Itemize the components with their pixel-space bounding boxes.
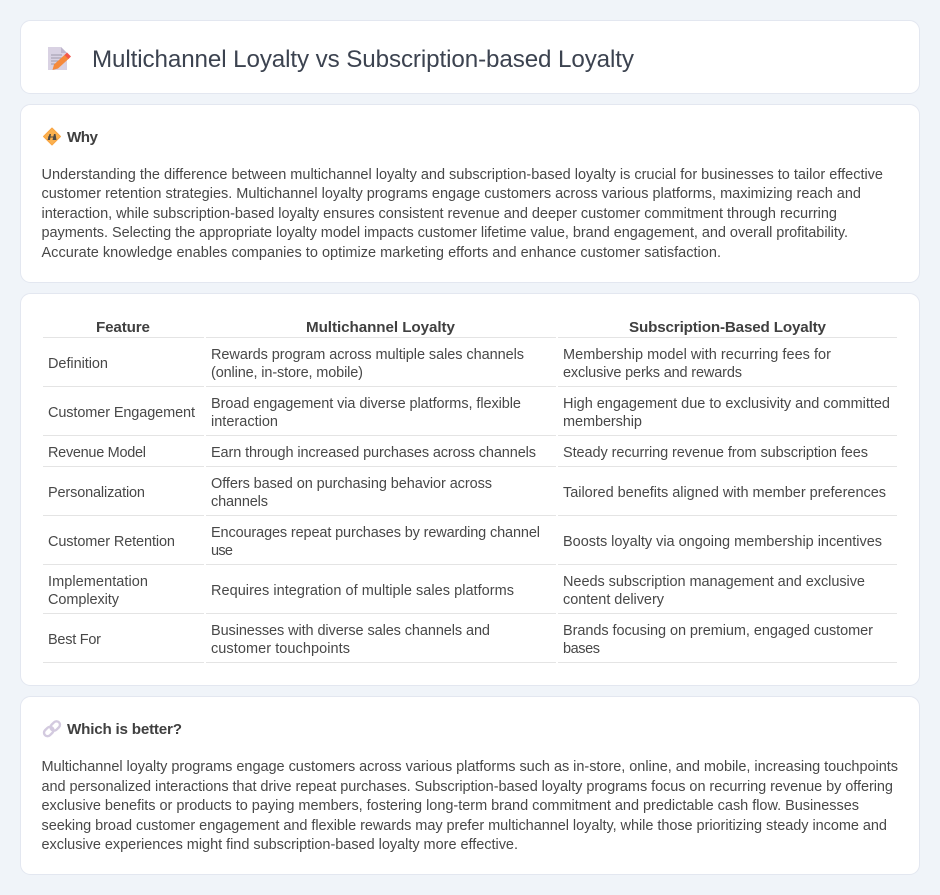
row: definition: (online, in-store, mobile)	[211, 365, 363, 381]
row: customer retention: Customer Retention	[48, 534, 175, 550]
row: personalization: channels	[211, 494, 268, 510]
row: customer retention: use	[211, 543, 233, 559]
row: personalization: Offers based on purchasing behavior across	[211, 476, 492, 492]
row: implementation complexity: Implementation	[48, 574, 148, 590]
text block: which is better: Multichannel loyalty programs engage customers across various platforms such as in-store, online, and mobile, increasing touchpoints	[42, 759, 898, 775]
row: best for: Best For	[48, 632, 101, 648]
row: best for: customer touchpoints	[211, 641, 350, 657]
text block: which is better	[42, 759, 898, 853]
panel: comparison table	[20, 294, 920, 686]
row: best for: Brands focusing on premium, engaged customer	[563, 623, 873, 639]
text block: why: customer retention strategies. Multichannel loyalty programs engage customers across various platforms, maximizing reach and	[42, 186, 861, 202]
row: customer retention: Boosts loyalty via ongoing membership incentives	[563, 534, 882, 550]
row: best for: Businesses with diverse sales channels and	[211, 623, 490, 639]
text block: why: payments. Selecting the appropriate loyalty model impacts customer lifetime value, brand engagement, and overall profitability.	[42, 225, 848, 241]
icon: chain link	[43, 720, 61, 738]
row: customer engagement: membership	[563, 414, 642, 430]
row: customer retention	[48, 525, 882, 559]
panel: title header	[20, 20, 920, 94]
row: implementation complexity: Complexity	[48, 592, 120, 608]
row: customer engagement	[48, 396, 890, 430]
text block: which is better: exclusive experiences might find subscription-based loyalty more effective.	[42, 837, 518, 853]
row: definition	[48, 347, 831, 381]
panel: which is better	[20, 696, 920, 874]
icon: document with pencil	[48, 47, 71, 70]
text block: why: Accurate knowledge enables companies to optimize marketing efforts and enhance customer satisfaction.	[42, 245, 721, 261]
text block: which is better: and personalized interactions that drive repeat purchases. Subscription-based loyalty programs focus on recurring revenue by offering	[42, 779, 893, 795]
table header row: Feature	[96, 319, 150, 336]
row: revenue model	[48, 445, 868, 461]
row: personalization: Tailored benefits aligned with member preferences	[563, 485, 886, 501]
text block: which is better: exclusive benefits or products to paying members, fostering long-term brand commitment and predictable cash flow. Businesses	[42, 798, 859, 814]
row: customer retention: Encourages repeat purchases by rewarding channel	[211, 525, 540, 541]
icon: orange diamond sign	[44, 128, 60, 145]
row: definition: Membership model with recurring fees for	[563, 347, 831, 363]
row: personalization: Personalization	[48, 485, 145, 501]
row: implementation complexity: content delivery	[563, 592, 665, 608]
table header row	[96, 319, 827, 336]
row: definition: Rewards program across multiple sales channels	[211, 347, 524, 363]
row: customer engagement: interaction	[211, 414, 278, 430]
row: personalization	[48, 476, 886, 510]
row: customer engagement: High engagement due to exclusivity and committed	[563, 396, 890, 412]
text block: why	[42, 167, 883, 261]
table header row: Subscription-Based Loyalty	[629, 319, 827, 336]
text block: why: Understanding the difference between multichannel loyalty and subscription-based loyalty is crucial for businesses to tailor effective	[42, 167, 883, 183]
row: revenue model: Earn through increased purchases across channels	[211, 445, 536, 461]
panel: why	[20, 104, 920, 282]
row: definition: Definition	[48, 356, 108, 372]
row: implementation complexity	[48, 574, 865, 608]
row: implementation complexity: Requires integration of multiple sales platforms	[211, 583, 514, 599]
table header row: Multichannel Loyalty	[306, 319, 456, 336]
row: revenue model: Steady recurring revenue from subscription fees	[563, 445, 868, 461]
text block: why: interaction, while subscription-based loyalty ensures consistent revenue and deeper customer commitment through recurring	[42, 206, 837, 222]
title: Multichannel Loyalty vs Subscription-based Loyalty	[92, 46, 635, 73]
row: customer engagement: Broad engagement via diverse platforms, flexible	[211, 396, 521, 412]
text block: which is better: seeking broad customer engagement and flexible rewards may prefer multichannel loyalty, while those prioritizing steady income and	[42, 818, 887, 834]
row: implementation complexity: Needs subscription management and exclusive	[563, 574, 865, 590]
row: best for	[48, 623, 873, 657]
row: customer engagement: Customer Engagement	[48, 405, 195, 421]
row: definition: exclusive perks and rewards	[563, 365, 742, 381]
heading: why: Why	[67, 129, 99, 146]
heading: which is better: Which is better?	[67, 721, 182, 738]
row: revenue model: Revenue Model	[48, 445, 146, 461]
row: best for: bases	[563, 641, 600, 657]
